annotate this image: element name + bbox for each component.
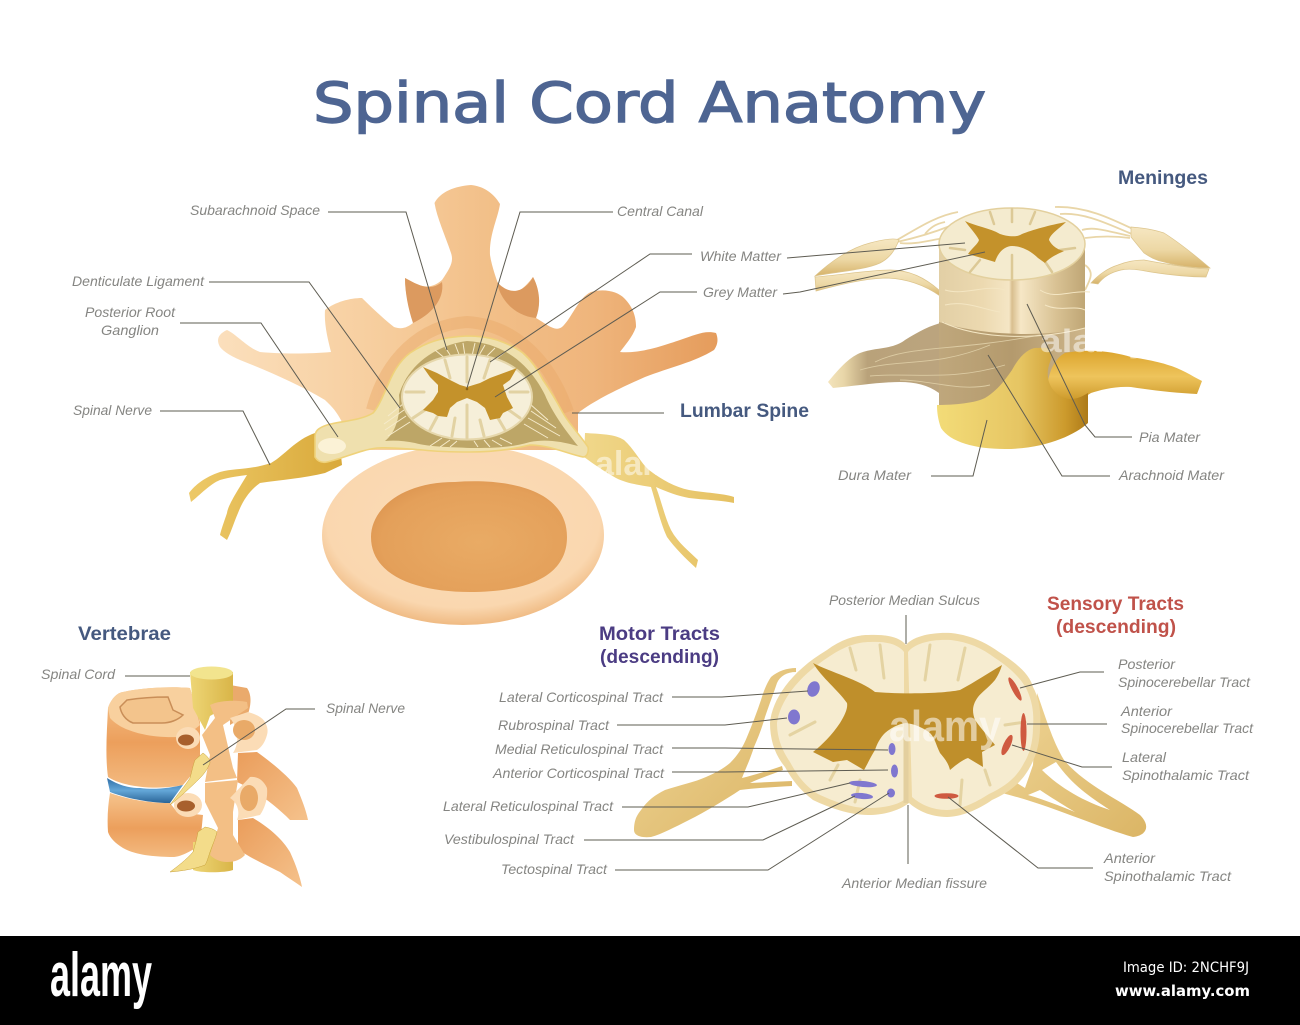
labels: tracts: Lateral Corticospinal Tract	[499, 689, 664, 705]
labels: tracts: Posterior	[1118, 656, 1176, 672]
labels: lumbar spine: Grey Matter	[703, 284, 778, 300]
footer url: www.alamy.com	[1115, 982, 1250, 1000]
arachnoid nerve left	[828, 322, 960, 395]
watermark: alam	[595, 445, 672, 483]
intervertebral disc	[107, 778, 183, 803]
cord outline	[770, 633, 1040, 817]
lower wing	[238, 818, 302, 887]
heading: vertebrae: Vertebrae	[78, 624, 171, 645]
diagram: vertebrae column	[106, 666, 308, 887]
diagram: meninges	[815, 207, 1210, 449]
heading: sensory tracts: (descending)	[1056, 617, 1176, 638]
footer band	[0, 936, 1300, 1025]
central canal	[466, 388, 468, 390]
upper right nerve strand	[1091, 260, 1209, 284]
upper vertebral body	[106, 687, 200, 788]
inner endplate	[120, 697, 183, 723]
labels: tracts: Spinothalamic Tract	[1104, 868, 1232, 884]
labels: tracts: Rubrospinal Tract	[498, 717, 610, 733]
upper articular column	[202, 701, 248, 782]
grey matter	[813, 663, 1002, 770]
vertebral body	[322, 445, 604, 625]
labels: tracts: Medial Reticulospinal Tract	[495, 741, 664, 757]
subarachnoid space	[385, 341, 578, 448]
leader lines: lumbar spine	[160, 212, 697, 465]
labels: tracts: Spinocerebellar Tract	[1121, 720, 1254, 736]
vertebral arch and spinous process	[218, 185, 717, 450]
watermark: alamy	[889, 702, 1001, 751]
icon: left spinal nerve	[189, 433, 342, 540]
spinal cord top	[190, 666, 233, 680]
title: Spinal Cord Anatomy	[313, 71, 986, 135]
grey matter	[965, 221, 1066, 263]
lower facet ring	[230, 777, 267, 820]
cord lower section	[193, 842, 233, 872]
dura mater sleeve	[937, 348, 1088, 449]
labels: tracts	[443, 592, 1254, 891]
lower articular column	[205, 780, 245, 862]
foramen upper hole	[178, 734, 194, 746]
heading: motor tracts	[599, 624, 720, 668]
cord cross-section	[939, 208, 1085, 280]
white matter fissures	[790, 645, 1025, 805]
left ganglion highlight	[318, 438, 346, 454]
upper facet hole	[233, 720, 255, 740]
foramen upper	[176, 727, 200, 749]
labels: vertebrae: Spinal Nerve	[326, 700, 405, 716]
labels: lumbar spine: Central Canal	[617, 203, 704, 219]
upper body top face	[108, 687, 200, 737]
sensory tract markers	[934, 676, 1026, 799]
labels: lumbar spine: Spinal Nerve	[73, 402, 152, 418]
labels: meninges: Dura Mater	[838, 467, 912, 483]
footer image id: Image ID: 2NCHF9J	[1123, 960, 1249, 976]
footer logo: alamy	[50, 941, 152, 1010]
labels: tracts: Lateral Reticulospinal Tract	[443, 798, 614, 814]
arachnoid strands	[860, 335, 1040, 387]
fissures in white matter	[406, 357, 528, 438]
central median septum	[904, 723, 908, 803]
left nerve	[634, 668, 796, 837]
labels: tracts: Vestibulospinal Tract	[444, 831, 575, 847]
diagram: lumbar spine cross-section	[189, 185, 734, 625]
rootlets	[384, 343, 560, 447]
labels: tracts: Tectospinal Tract	[501, 861, 608, 877]
lower nerve	[170, 827, 217, 872]
arachnoid column	[939, 322, 1085, 405]
upper left nerve strand	[815, 270, 940, 296]
grey matter	[423, 367, 517, 420]
labels: lumbar spine: Ganglion	[101, 322, 159, 338]
white matter	[402, 354, 532, 440]
cross-section fissures	[950, 209, 1075, 279]
white matter	[777, 640, 1033, 810]
labels: tracts: Anterior Median fissure	[841, 875, 987, 891]
labels: vertebrae	[41, 666, 405, 716]
labels: lumbar spine: White Matter	[700, 248, 782, 264]
labels: meninges	[838, 429, 1225, 483]
upper nerve	[170, 753, 210, 805]
upper left ganglion	[815, 239, 899, 276]
heading: motor tracts: Motor Tracts	[599, 624, 720, 645]
heading: sensory tracts: Sensory Tracts	[1047, 594, 1184, 615]
labels: meninges: Arachnoid Mater	[1118, 467, 1225, 483]
labels: tracts: Anterior Corticospinal Tract	[492, 765, 665, 781]
leader lines: tracts	[584, 615, 1112, 870]
leader lines: vertebrae	[125, 676, 315, 765]
labels: vertebrae: Spinal Cord	[41, 666, 116, 682]
upper facet ring	[230, 712, 268, 753]
foramen lower	[174, 793, 202, 817]
back flap	[230, 685, 250, 725]
labels: lumbar spine: Denticulate Ligament	[72, 273, 205, 289]
heading: lumbar spine: Lumbar Spine	[680, 401, 809, 422]
labels: lumbar spine	[72, 202, 782, 418]
diagram: spinal cord tracts	[634, 633, 1146, 837]
labels: tracts: Lateral	[1122, 749, 1167, 765]
labels: tracts: Posterior Median Sulcus	[829, 592, 980, 608]
lower facet hole	[240, 785, 258, 811]
heading: sensory tracts	[1047, 594, 1184, 638]
lower gap in right nerve	[1028, 790, 1075, 812]
pia nerve strands	[942, 288, 1090, 336]
thin rootlets left and right	[897, 207, 1135, 298]
heading: motor tracts: (descending)	[600, 647, 719, 668]
gap in right nerve	[1042, 762, 1110, 810]
upper wing	[237, 752, 308, 820]
labels: lumbar spine: Subarachnoid Space	[190, 202, 320, 218]
spinal cord	[190, 672, 233, 730]
dura right nerve	[1047, 351, 1202, 403]
heading: meninges: Meninges	[1118, 168, 1208, 189]
leader lines: meninges	[783, 243, 1132, 476]
labels: meninges: Pia Mater	[1139, 429, 1201, 445]
pia column	[939, 244, 1085, 335]
foramen lower hole	[177, 800, 195, 812]
right nerve	[1002, 693, 1146, 837]
icon: right spinal nerve	[584, 433, 734, 568]
upper right ganglion	[1131, 227, 1210, 268]
dura enclosure	[315, 336, 588, 462]
labels: tracts: Spinocerebellar Tract	[1118, 674, 1251, 690]
shadow of spinous wings	[405, 278, 442, 323]
lamina shading around canal	[372, 322, 568, 412]
motor tract markers	[788, 679, 898, 800]
nucleus of vertebral body	[371, 481, 567, 592]
lower vertebral body	[108, 793, 203, 857]
labels: tracts: Spinothalamic Tract	[1122, 767, 1250, 783]
labels: lumbar spine: Posterior Root	[85, 304, 176, 320]
watermark: alamy	[1040, 323, 1150, 359]
labels: tracts: Anterior	[1103, 850, 1156, 866]
labels: tracts: Anterior	[1120, 703, 1173, 719]
